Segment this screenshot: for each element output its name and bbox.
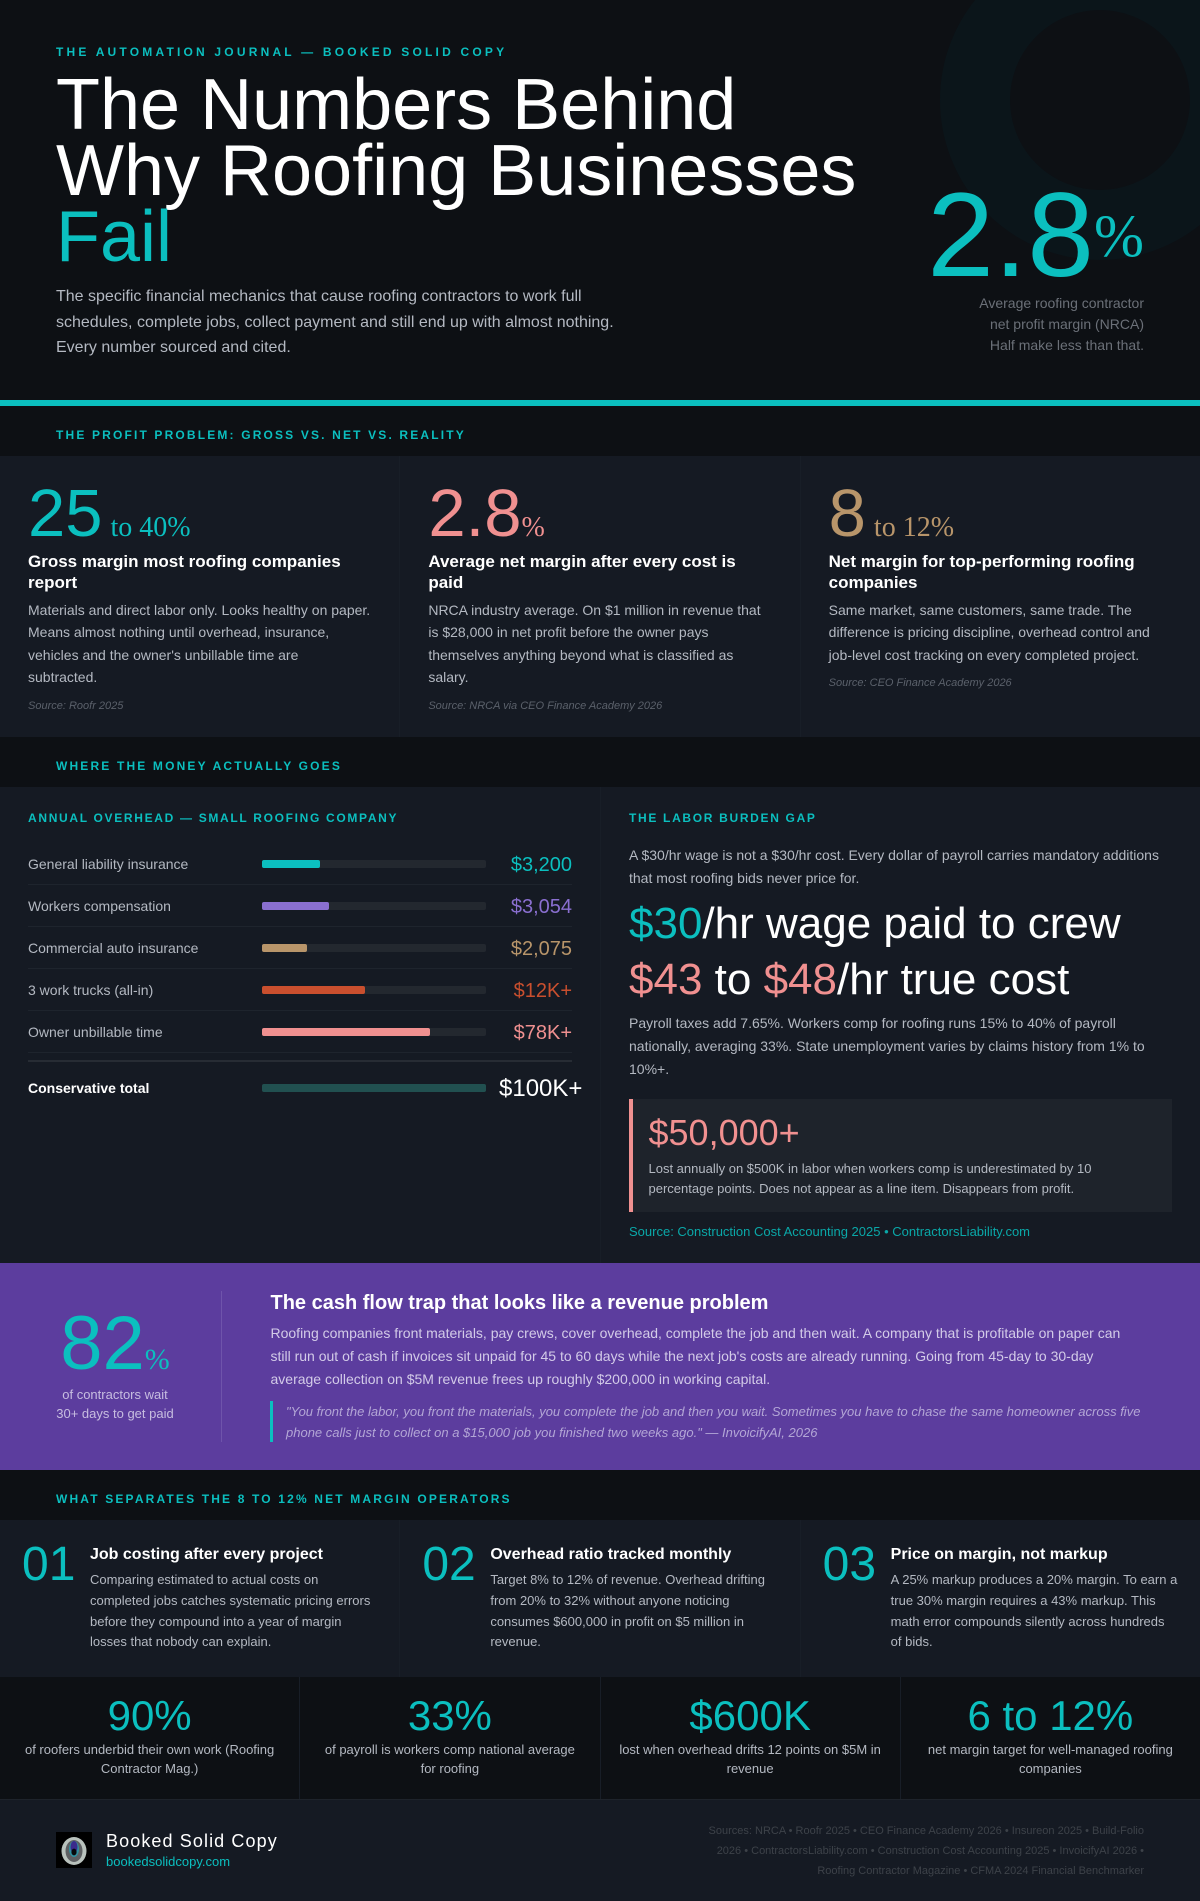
stat source: Source: Roofr 2025 (28, 700, 123, 712)
bar row: owner unbillable: $78K+ (514, 1022, 572, 1044)
labor body: Payroll taxes add 7.65%. Workers comp for roofing runs 15% to 40% of payroll (629, 1015, 1116, 1031)
practice body: before they compound into a year of margin (90, 1614, 341, 1629)
callout text: percentage points. Does not appear as a line item. Disappears from profit. (648, 1181, 1074, 1196)
hero subtitle: Every number sourced and cited. (56, 339, 291, 356)
bar row: conservative total: $100K+ (499, 1075, 582, 1102)
wage comparison: $30/hr wage paid to crew (629, 899, 1121, 948)
stat title (829, 552, 1135, 592)
stat body: Means almost nothing until overhead, insurance, (28, 624, 329, 640)
brand url: bookedsolidcopy.com (106, 1854, 230, 1869)
bar row: commercial auto: Commercial auto insurance (28, 940, 198, 956)
hero subtitle: The specific financial mechanics that cause roofing contractors to work full (56, 288, 582, 305)
bar row: work trucks: 3 work trucks (all-in) (28, 982, 153, 998)
figure: 600K (619, 1692, 881, 1776)
practice body: losses that nobody can explain. (90, 1634, 271, 1649)
vertical divider (221, 1291, 222, 1442)
teal divider bar (0, 400, 1200, 406)
stat card: gross margin (28, 476, 370, 712)
panel: labor burden gap (629, 811, 1172, 1239)
hero subtitle (56, 288, 614, 356)
chart: annual overhead (28, 811, 582, 1102)
practice title: Overhead ratio tracked monthly (490, 1546, 731, 1563)
stat title: report (28, 573, 77, 592)
labor body: nationally, averaging 33%. State unemployment varies by claims history from 1% to (629, 1038, 1145, 1054)
stat body: job-level cost tracking on every completed project. (829, 647, 1139, 663)
stat body: NRCA industry average. On $1 million in revenue that (428, 602, 761, 618)
bar row: work trucks: $12K+ (514, 980, 572, 1002)
stat body: salary. (428, 669, 469, 685)
number: 02 (422, 1538, 476, 1591)
stat body (428, 602, 761, 685)
stat body: Materials and direct labor only. Looks healthy on paper. (28, 602, 370, 618)
stat title: Net margin for top-performing roofing (829, 552, 1135, 571)
stat body (28, 602, 370, 685)
stat number: 25 to 40% (28, 476, 191, 551)
stat body: themselves anything beyond what is classified as (428, 647, 733, 663)
hero stat caption: Average roofing contractor (979, 295, 1144, 311)
practice body (890, 1572, 1178, 1649)
practice body: from 20% to 32% without anyone noticing (490, 1593, 730, 1608)
practice body: true 30% margin requires a 43% markup. This (891, 1593, 1156, 1608)
sources: Sources: NRCA • Roofr 2025 • CEO Finance Academy 2026 • Insureon 2025 • Build-Folio (709, 1825, 1144, 1837)
bar row: owner unbillable: Owner unbillable time (28, 1024, 163, 1040)
figure: 90 percent: of roofers underbid their own work (Roofing (25, 1742, 274, 1757)
stat title: Average net margin after every cost is (428, 552, 736, 571)
figure: 33 percent: 33% (408, 1692, 492, 1739)
stat body: is $28,000 in net profit before the owner pays (428, 624, 709, 640)
labor heading: THE LABOR BURDEN GAP (629, 811, 817, 825)
cash flow body: Roofing companies front materials, pay crews, cover overhead, complete the job and then wait. A company that is profitable on paper can (270, 1324, 1120, 1340)
section heading: operators: WHAT SEPARATES THE 8 TO 12% NET MARGIN OPERATORS (56, 1492, 512, 1506)
figure: 33 percent: for roofing (421, 1761, 479, 1776)
bar row: conservative total: Conservative total (28, 1080, 149, 1096)
sources: 2026 • ContractorsLiability.com • Construction Cost Accounting 2025 • InvoicifyAI 2026 • (717, 1845, 1144, 1857)
quote: phone calls just to collect on a $15,000 job you finished two weeks ago." — InvoicifyAI, 2026 (286, 1425, 817, 1440)
figure: 6 to 12 percent (928, 1692, 1173, 1776)
labor intro (629, 847, 1159, 886)
wage comparison (629, 899, 1121, 1004)
stat source: Source: NRCA via CEO Finance Academy 2026 (428, 700, 662, 712)
figure: 6 to 12 percent: 6 to 12% (967, 1692, 1133, 1739)
sources (709, 1825, 1144, 1877)
stat title: companies (829, 573, 917, 592)
practice body: Target 8% to 12% of revenue. Overhead drifting (490, 1572, 765, 1587)
quote (270, 1401, 1170, 1442)
cash flow body: average collection on $5M revenue frees up roughly $200,000 in working capital. (270, 1371, 770, 1387)
stat source: Source: CEO Finance Academy 2026 (829, 677, 1012, 689)
labor intro: that most roofing bids never price for. (629, 870, 859, 886)
labor source: Source: Construction Cost Accounting 2025 • ContractorsLiability.com (629, 1224, 1030, 1239)
practice body (490, 1572, 765, 1649)
stat body: vehicles and the owner's unbillable time are (28, 647, 298, 663)
labor body (629, 1015, 1145, 1077)
stat card: top performers (828, 476, 1150, 689)
practice body: completed jobs catches systematic pricing errors (90, 1593, 370, 1608)
sources: Roofing Contractor Magazine • CFMA 2024 Financial Benchmarker (817, 1865, 1144, 1877)
figure: 90 percent: 90% (108, 1692, 192, 1739)
hero stat: 2.8% (927, 168, 1144, 302)
figure: 600K: $600K (689, 1692, 811, 1739)
stat: 82 percent: 82% (60, 1301, 170, 1386)
bar row: workers compensation: Workers compensation (28, 898, 171, 914)
bar row: general liability: $3,200 (511, 854, 572, 876)
stat number: 8 to 12% (829, 476, 954, 551)
practice title: Job costing after every project (90, 1546, 323, 1563)
stat caption: 30+ days to get paid (56, 1406, 174, 1421)
panel: three practices (0, 1520, 1200, 1677)
number: 03 (823, 1538, 876, 1591)
decorative ring (940, 0, 1200, 260)
title (56, 65, 856, 277)
stat caption: of contractors wait (62, 1387, 168, 1402)
section heading: where the money goes: WHERE THE MONEY ACTUALLY GOES (56, 759, 342, 773)
chart heading: ANNUAL OVERHEAD — SMALL ROOFING COMPANY (28, 811, 398, 825)
labor body: 10%+. (629, 1061, 669, 1077)
bar row: workers compensation (28, 885, 572, 927)
bar row: general liability (28, 843, 572, 885)
panel: key figures strip (0, 1677, 1200, 1799)
practice body: revenue. (490, 1634, 541, 1649)
callout figure: $50,000+ (648, 1112, 800, 1153)
bar row: general liability: General liability insurance (28, 856, 188, 872)
section heading: profit problem: THE PROFIT PROBLEM: GROSS VS. NET VS. REALITY (56, 428, 466, 442)
hero stat caption: net profit margin (NRCA) (990, 316, 1144, 332)
stat body (828, 602, 1150, 663)
hero stat caption (979, 295, 1144, 353)
stat number: 2.8% (428, 476, 545, 551)
practice body: of bids. (891, 1634, 933, 1649)
bar row: owner unbillable (28, 1011, 572, 1053)
practice 01 (22, 1538, 370, 1649)
bar row: conservative total (28, 1060, 572, 1116)
callout text (648, 1161, 1091, 1196)
practice 03 (823, 1538, 1178, 1649)
callout text: Lost annually on $500K in labor when workers comp is underestimated by 10 (648, 1161, 1091, 1176)
icon: logo (56, 1832, 92, 1868)
figure: 600K: lost when overhead drifts 12 points on $5M in (619, 1742, 881, 1757)
panel: money breakdown (0, 787, 1200, 1263)
callout (629, 1099, 1172, 1212)
labor intro: A $30/hr wage is not a $30/hr cost. Every dollar of payroll carries mandatory additions (629, 847, 1159, 863)
bar row: work trucks (28, 969, 572, 1011)
practice 02 (422, 1538, 765, 1649)
wage comparison: $43 to $48/hr true cost (629, 955, 1069, 1004)
stat title: paid (428, 573, 463, 592)
practice body: math error compounds silently across hundreds (891, 1614, 1165, 1629)
practice body: consumes $600,000 in profit on $5 million in (490, 1614, 744, 1629)
cash flow title: The cash flow trap that looks like a revenue problem (270, 1292, 768, 1314)
stat title (28, 552, 341, 592)
title: Fail (56, 197, 172, 277)
figure: 90 percent (25, 1692, 274, 1776)
panel: hero (0, 0, 1200, 400)
quote: "You front the labor, you front the materials, you complete the job and then you wait. Sometimes you have to chase the same homeowner across five (286, 1404, 1140, 1419)
stat title (428, 552, 736, 592)
figure: 6 to 12 percent: net margin target for well-managed roofing (928, 1742, 1173, 1757)
stat body: Same market, same customers, same trade. The (829, 602, 1132, 618)
practice title: Price on margin, not markup (891, 1546, 1108, 1563)
bar row: workers compensation: $3,054 (511, 896, 572, 918)
brand name: Booked Solid Copy (106, 1831, 278, 1851)
cash flow body (270, 1324, 1120, 1387)
bar row: commercial auto: $2,075 (511, 938, 572, 960)
figure: 6 to 12 percent: companies (1019, 1761, 1082, 1776)
figure: 600K: revenue (727, 1761, 774, 1776)
figure: 33 percent (325, 1692, 575, 1776)
hero subtitle: schedules, complete jobs, collect payment and still end up with almost nothing. (56, 314, 614, 331)
practice body: A 25% markup produces a 20% margin. To earn a (891, 1572, 1177, 1587)
panel: profit stats (0, 456, 1200, 737)
eyebrow: THE AUTOMATION JOURNAL — BOOKED SOLID COPY (56, 45, 507, 59)
stat title: Gross margin most roofing companies (28, 552, 341, 571)
figure: 90 percent: Contractor Mag.) (101, 1761, 198, 1776)
stat caption (56, 1387, 174, 1421)
stat body: difference is pricing discipline, overhead control and (829, 624, 1150, 640)
panel: cash flow trap (0, 1263, 1200, 1470)
practice body: Comparing estimated to actual costs on (90, 1572, 318, 1587)
title: The Numbers Behind (56, 65, 736, 145)
figure: 33 percent: of payroll is workers comp national average (325, 1742, 575, 1757)
cash flow body: still run out of cash if invoices sit unpaid for 45 to 60 days while the next job's costs are already running. Going from 45-day to 30-day (270, 1348, 1093, 1364)
number: 01 (22, 1538, 75, 1591)
stat body: subtracted. (28, 669, 97, 685)
stat card: net margin (428, 476, 761, 712)
panel: footer (0, 1799, 1200, 1901)
practice body (90, 1572, 370, 1649)
hero stat caption: Half make less than that. (990, 337, 1144, 353)
title: Why Roofing Businesses (56, 131, 856, 211)
bar row: commercial auto (28, 927, 572, 969)
